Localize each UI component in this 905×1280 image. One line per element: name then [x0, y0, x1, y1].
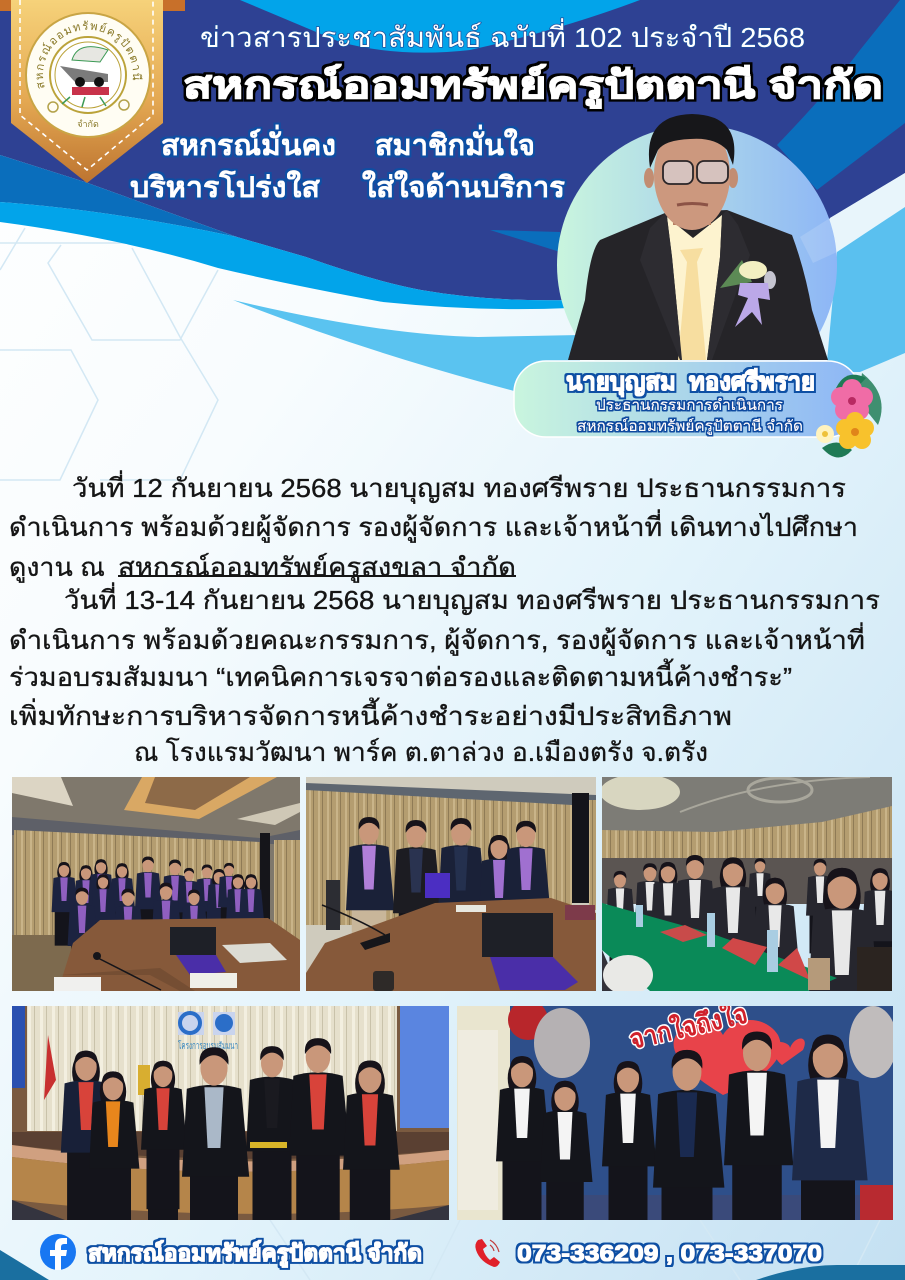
name plate: สหกรณ์ออมทรัพย์ครูปัตตานี จำกัด [577, 418, 803, 435]
portrait of chairman [557, 114, 837, 405]
name plate: ประธานกรรมการดำเนินการ [596, 397, 783, 414]
header wave shapes [0, 0, 905, 391]
background hexagon pattern [0, 228, 880, 1280]
article body text: วันที่ 12 กันยายน 2568 นายบุญสม ทองศรีพราย ประธานกรรมการ [72, 470, 846, 504]
icon: cooperative seal: จำกัด [77, 119, 99, 129]
slogans: สมาชิกมั่นใจ [375, 125, 535, 162]
article body text: ดำเนินการ พร้อมด้วยผู้จัดการ รองผู้จัดการ และเจ้าหน้าที่ เดินทางไปศึกษา [9, 509, 858, 543]
article body text: ดำเนินการ พร้อมด้วยคณะกรรมการ, ผู้จัดการ, รองผู้จัดการ และเจ้าหน้าที่ [9, 622, 865, 656]
photo: six staff before heart backdrop [457, 1006, 893, 1220]
slogans [130, 125, 565, 204]
phone numbers: 073-336209 , 073-337070 [517, 1240, 822, 1266]
logo pennant [0, 0, 185, 183]
photo: seven delegates at hotel seminar [12, 1006, 449, 1220]
photo: delegates exchanging a gift [306, 777, 596, 991]
photo: seven delegates at hotel seminar: โครงการอบรมสัมมนา [178, 1039, 238, 1052]
facebook page name: สหกรณ์ออมทรัพย์ครูปัตตานี จำกัด [88, 1240, 422, 1268]
footer corner shapes [0, 1250, 905, 1280]
name plate: นายบุญสม ทองศรีพราย [566, 368, 815, 398]
photo: seminar audience [602, 777, 892, 991]
slogans: ใส่ใจด้านบริการ [362, 170, 565, 204]
icon: telephone [475, 1239, 500, 1267]
icon: cooperative seal [25, 12, 151, 138]
photo: six staff before heart backdrop: จากใจถึงใจ [626, 998, 750, 1055]
article body text: สหกรณ์ออมทรัพย์ครูสงขลา จำกัด [118, 552, 516, 583]
slogans: สหกรณ์มั่นคง [161, 125, 336, 162]
article body text: เพิ่มทักษะการบริหารจัดการหนี้ค้างชำระอย่างมีประสิทธิภาพ [9, 697, 732, 731]
article body text: ณ โรงแรมวัฒนา พาร์ค ต.ตาล่วง อ.เมืองตรัง จ.ตรัง [134, 737, 708, 767]
icon: facebook [40, 1234, 76, 1270]
name plate [514, 361, 860, 437]
photo: group in meeting room [12, 777, 300, 991]
icon: cooperative seal: สหกรณ์ออมทรัพย์ครูปัตตานี [36, 20, 143, 89]
main title: สหกรณ์ออมทรัพย์ครูปัตตานี จำกัด [183, 64, 883, 109]
article body text [9, 470, 880, 767]
newsletter issue line: ข่าวสารประชาสัมพันธ์ ฉบับที่ 102 ประจำปี 2568 [200, 18, 805, 53]
article body text: ดูงาน ณ [9, 552, 105, 583]
slogans: บริหารโปร่งใส [130, 170, 320, 204]
article body text: ร่วมอบรมสัมมนา “เทคนิคการเจรจาต่อรองและติดตามหนี้ค้างชำระ” [9, 658, 792, 692]
icon: tropical flowers [816, 373, 882, 458]
article body text: วันที่ 13-14 กันยายน 2568 นายบุญสม ทองศรีพราย ประธานกรรมการ [64, 582, 880, 616]
icon: corsage [720, 260, 776, 327]
